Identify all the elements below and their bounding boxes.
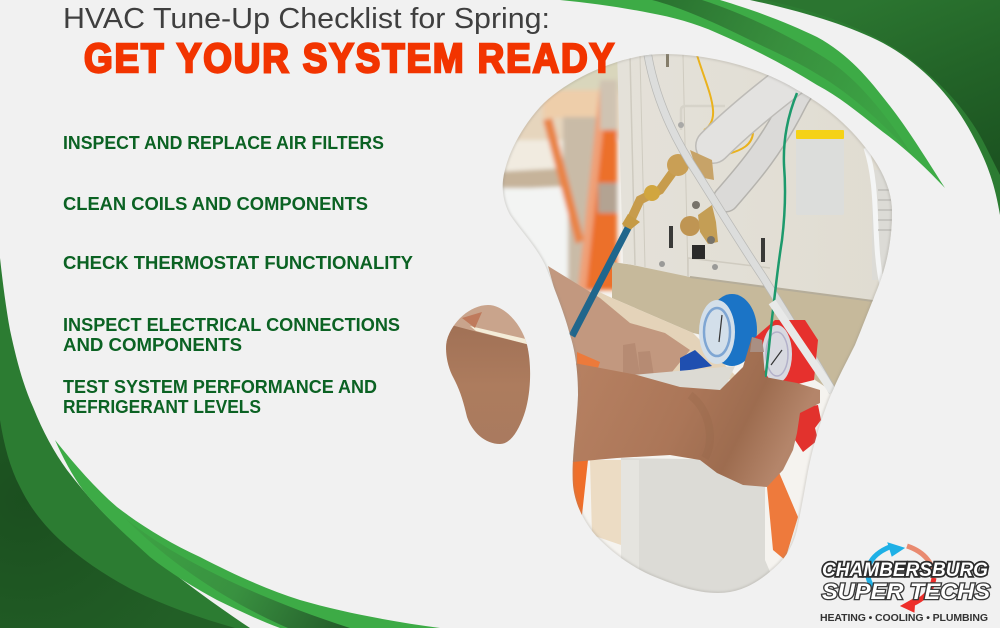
mid green blade shading — [125, 518, 350, 628]
label sticker — [796, 130, 844, 215]
AC unit body — [617, 50, 900, 301]
orange ladder lower — [572, 460, 798, 560]
light green blade — [560, 0, 945, 188]
logo services: HEATING • COOLING • PLUMBING — [820, 612, 988, 624]
item: electrical: INSPECT ELECTRICAL CONNECTIONS — [63, 314, 400, 335]
logo name line 2: SUPER TECHS — [822, 579, 990, 604]
logo name line 1: CHAMBERSBURG — [822, 560, 988, 581]
blob background — [446, 305, 528, 350]
item: performance: TEST SYSTEM PERFORMANCE AND — [63, 376, 377, 397]
headline: GET YOUR SYSTEM READY — [84, 36, 614, 81]
foam pipes — [713, 58, 820, 199]
blue pressure gauge — [699, 294, 757, 366]
subtitle: HVAC Tune-Up Checklist for Spring: — [63, 3, 550, 35]
thumbnail — [750, 337, 764, 352]
icon: circular hot and cold arrows — [868, 543, 934, 612]
item: coils: CLEAN COILS AND COMPONENTS — [63, 193, 368, 214]
checklist — [63, 132, 413, 417]
blue hose — [572, 228, 628, 336]
rear hand fingers — [623, 343, 654, 376]
foreground hose — [647, 50, 833, 392]
forearm — [446, 326, 530, 444]
item: performance: REFRIGERANT LEVELS — [63, 396, 261, 417]
top-right green swoosh — [560, 0, 1000, 215]
light green blade — [55, 440, 440, 628]
orange strip beside hand — [577, 352, 600, 368]
logo: Chambersburg Super Techs — [820, 543, 990, 624]
unit slots and screws — [659, 53, 765, 270]
floor behind hand — [596, 292, 735, 380]
hose over gauge — [772, 302, 833, 392]
blurred scenery — [502, 60, 623, 294]
window highlight — [470, 326, 526, 344]
green wire — [765, 93, 797, 380]
mid green blade shading — [652, 0, 912, 155]
photo blob: technician checking AC gauges — [495, 45, 900, 600]
darker inner corner — [0, 420, 235, 628]
item: thermostat: CHECK THERMOSTAT FUNCTIONALITY — [63, 252, 413, 273]
dark green corner — [750, 0, 1000, 215]
red valve handle — [795, 405, 821, 452]
item: air filters: INSPECT AND REPLACE AIR FILTERS — [63, 132, 384, 153]
rear hand — [548, 266, 690, 375]
dark green band — [0, 258, 250, 628]
bottom-left green swoosh — [0, 258, 440, 628]
wrist shadow — [690, 395, 710, 458]
item: electrical — [63, 314, 400, 355]
blob soft edge — [503, 54, 892, 593]
orange ladder glimpse — [462, 312, 482, 328]
tan wall under unit — [612, 262, 874, 391]
white bucket — [621, 366, 770, 593]
front arm and hand — [572, 337, 820, 487]
blue knob — [680, 350, 712, 372]
fan grille and right hose — [866, 148, 897, 285]
item: electrical: AND COMPONENTS — [63, 334, 242, 355]
darker inner corner — [765, 0, 1000, 175]
red pressure gauge — [752, 320, 818, 386]
small photo blob: forearm — [446, 305, 530, 444]
brass fittings — [622, 150, 718, 244]
yellow wire — [697, 55, 753, 154]
photo background — [495, 45, 900, 600]
item: performance — [63, 376, 377, 417]
